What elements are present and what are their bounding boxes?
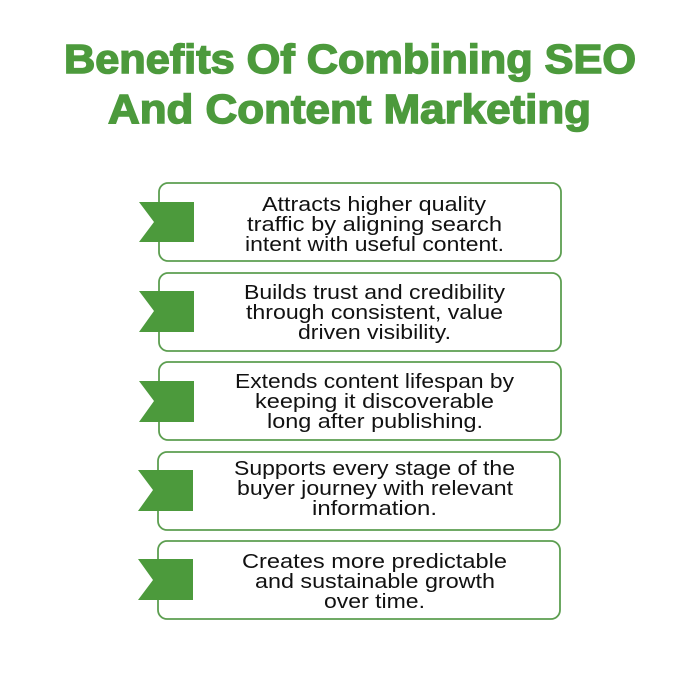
text: benefit 5: Creates more predictable — [242, 550, 507, 573]
icon: ribbon 4 — [138, 470, 193, 511]
panel: benefit 5 — [138, 541, 560, 619]
panel: benefit 4 — [138, 452, 560, 530]
text: benefit 2: driven visibility. — [298, 321, 451, 344]
title: And Content Marketing — [108, 86, 591, 132]
text: benefit 4: information. — [312, 497, 437, 520]
panel: benefit 1 — [139, 183, 561, 261]
text: benefit 4: buyer journey with relevant — [237, 477, 513, 500]
panel: benefit 3 — [139, 362, 561, 440]
text: benefit 3: long after publishing. — [267, 410, 483, 433]
text: benefit 4: Supports every stage of the — [234, 457, 515, 480]
title: Benefits Of Combining SEO — [64, 36, 636, 82]
text: benefit 3: Extends content lifespan by — [235, 370, 515, 393]
icon: ribbon 2 — [139, 291, 194, 332]
text: benefit 1: Attracts higher quality — [262, 193, 487, 216]
text: benefit 3 — [235, 370, 515, 433]
text: benefit 5 — [242, 550, 507, 613]
panel: benefit 2 — [139, 273, 561, 351]
text: benefit 4 — [234, 457, 515, 520]
icon: ribbon 3 — [139, 381, 194, 422]
text: benefit 1 — [245, 193, 504, 256]
text: benefit 5: over time. — [324, 590, 425, 613]
title — [64, 36, 636, 132]
text: benefit 1: traffic by aligning search — [247, 213, 502, 236]
icon: ribbon 1 — [139, 202, 194, 242]
text: benefit 2 — [244, 281, 506, 344]
text: benefit 2: Builds trust and credibility — [244, 281, 506, 304]
icon: ribbon 5 — [138, 559, 193, 600]
text: benefit 5: and sustainable growth — [255, 570, 495, 593]
text: benefit 3: keeping it discoverable — [255, 390, 494, 413]
text: benefit 1: intent with useful content. — [245, 233, 504, 256]
text: benefit 2: through consistent, value — [246, 301, 503, 324]
